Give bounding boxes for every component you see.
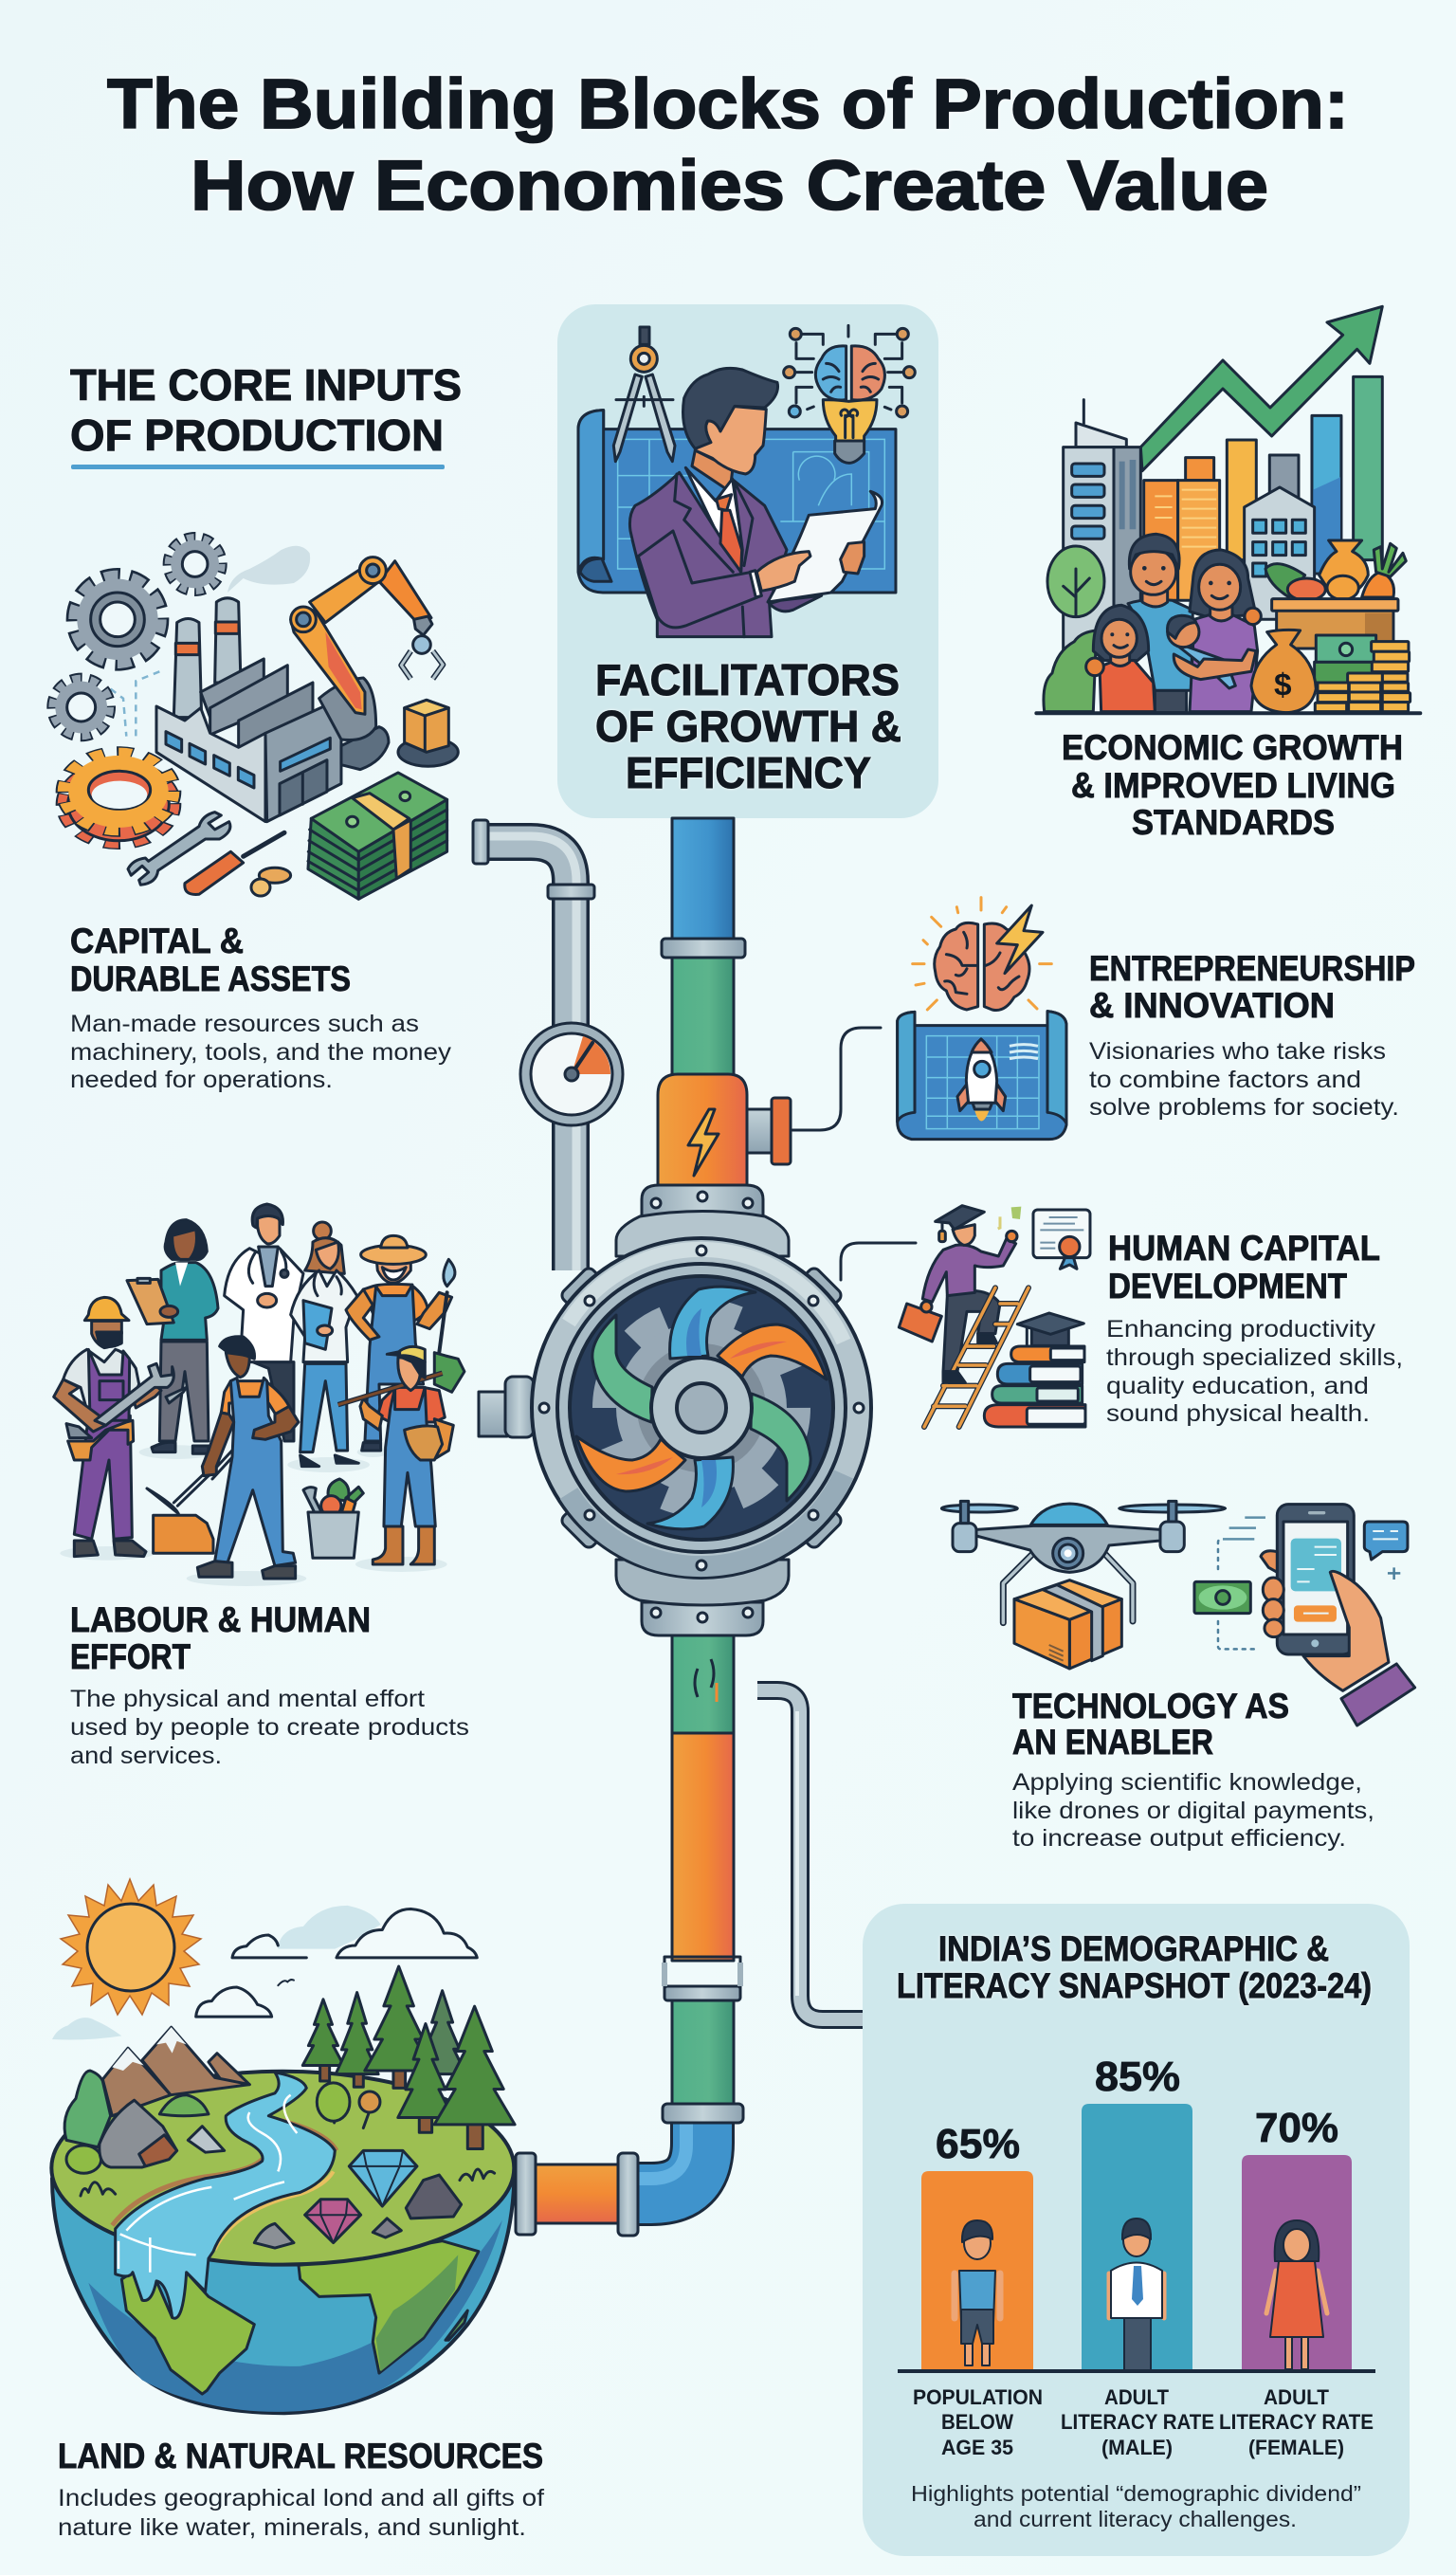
drone [941,1501,1226,1623]
shadows [60,1445,447,1586]
money bag, cash and coins [1251,630,1410,713]
blueprint with rocket [898,1012,1066,1140]
woman with clipboard [127,1220,218,1453]
text: capital and durable assets [70,922,452,1093]
bar labels: BELOW [941,2410,1013,2434]
title [107,64,1349,225]
text: labour and human effort: EFFORT [70,1637,191,1676]
smartphone [1277,1505,1354,1654]
bar labels: POPULATION [913,2385,1043,2409]
banknote and dotted payment path [1194,1518,1265,1649]
harvest crate and produce [1265,540,1406,648]
label: facilitators [595,655,901,797]
bar: 70 percent adult literacy female [1242,2105,1352,2371]
bricks and pick [147,1430,254,1553]
text: entrepreneurship and innovation: & INNOVATION [1089,986,1335,1025]
clouds [52,1906,477,2039]
bar labels: LITERACY RATE [1219,2410,1374,2434]
label: economic growth: ECONOMIC GROWTH [1062,728,1403,767]
text: land and natural resources: LAND & NATURAL RESOURCES [58,2437,543,2475]
lightning bolt [997,905,1043,974]
farmer with straw hat and trowel [346,1235,455,1451]
label: facilitators: OF GROWTH & [595,702,901,751]
text: technology as an enabler: like drones or digital payments, [1012,1798,1374,1824]
text: technology as an enabler [1012,1687,1374,1852]
text: human capital development: sound physical health. [1106,1400,1370,1427]
panel footnote: and current literacy challenges. [974,2507,1297,2531]
text: labour and human effort: The physical and mental effort [70,1686,425,1712]
certificate [998,1207,1090,1269]
text: entrepreneurship and innovation: solve problems for society. [1089,1094,1399,1121]
connector line to human capital [841,1243,916,1280]
text: human capital development: HUMAN CAPITAL [1108,1229,1380,1268]
icon: graduate climbing ladder [899,1206,1090,1427]
text: human capital development: DEVELOPMENT [1108,1267,1347,1306]
label: economic growth: & IMPROVED LIVING [1071,766,1395,805]
panel heading: INDIA’S DEMOGRAPHIC & [938,1929,1329,1968]
robot arm [291,557,443,770]
icon: factory tools and money [52,538,458,899]
text: technology as an enabler: Applying scientific knowledge, [1012,1769,1362,1796]
figure: manager in purple suit [629,368,883,637]
label: economic growth: STANDARDS [1132,803,1335,842]
pipe: thin grey capital pipe [473,820,594,1270]
heading: the core inputs of production: OF PRODUCTION [70,411,444,460]
stack of books and cap [984,1313,1085,1427]
connector line to entrepreneurship [792,1028,881,1130]
label: facilitators: FACILITATORS [595,655,900,704]
factory building [156,598,341,822]
panel: India's demographic and literacy snapshot [863,1904,1410,2556]
text: labour and human effort: LABOUR & HUMAN [70,1600,371,1639]
icon: compass [613,327,675,462]
panel footnote: Highlights potential “demographic dividend” [911,2481,1361,2506]
bar: 65 percent population below age 35 [921,2121,1033,2371]
label: facilitators: EFFICIENCY [626,748,871,797]
heading: the core inputs of production [70,360,462,469]
bar: 65 percent population below age 35: 65% [936,2121,1020,2167]
hand and sleeve [1261,1551,1415,1726]
title: How Economies Create Value [191,146,1268,225]
icon: globe with land and resources [51,1906,515,2413]
icon: economic growth city and family [1036,306,1420,713]
icon: drone, parcel and smartphone [941,1501,1415,1726]
nurse [291,1222,358,1467]
mountains, boulders and bush [64,2027,495,2196]
heading: the core inputs of production: THE CORE INPUTS [70,360,462,410]
text: technology as an enabler: AN ENABLER [1012,1723,1213,1762]
text: human capital development: quality education, and [1106,1373,1369,1399]
text: entrepreneurship and innovation [1089,949,1415,1121]
bar labels: (MALE) [1101,2436,1173,2459]
text: land and natural resources [58,2437,544,2541]
land disc [51,2072,514,2265]
bar: 85 percent adult literacy male: 85% [1095,2054,1180,2100]
text: land and natural resources: Includes geographical lond and all gifts of [58,2485,544,2511]
bar: 85 percent adult literacy male [1082,2054,1192,2371]
doctor [225,1204,303,1441]
text: human capital development: Enhancing productivity [1106,1316,1376,1342]
bars: growth chart [1227,376,1382,574]
text: labour and human effort [70,1600,469,1769]
text: land and natural resources: nature like water, minerals, and sunlight. [58,2514,526,2541]
text: human capital development: through specialized skills, [1106,1344,1403,1371]
icon: workers group [54,1204,464,1586]
bar labels [913,2385,1374,2459]
money bag, cash and coins: $ [1274,667,1292,703]
text: entrepreneurship and innovation: Visionaries who take risks [1089,1038,1386,1065]
small crate on stand [398,700,458,766]
bucket of vegetables [303,1479,363,1558]
text: capital and durable assets: Man-made resources such as [70,1011,419,1037]
text: capital and durable assets: DURABLE ASSETS [70,959,351,998]
icon: brain light bulb [784,325,915,463]
globe body and continents [52,2164,515,2413]
panel: facilitators of growth and efficiency [557,304,938,818]
tree and bush [1044,546,1104,712]
bar chart [898,2054,1375,2459]
bar labels: ADULT [1104,2385,1170,2409]
icon: sun [61,1879,201,2015]
bar labels: ADULT [1264,2385,1330,2409]
valve: orange side valve [747,1098,791,1164]
person legs behind ladder [943,1291,1000,1372]
worker with hard hat and wrench [54,1297,187,1557]
arrow: rising green trend [1140,306,1382,471]
family [1086,534,1261,713]
parcel [1014,1580,1121,1669]
text: entrepreneurship and innovation: ENTREPRENEURSHIP [1089,949,1415,988]
title: The Building Blocks of Production: [107,64,1349,143]
climbing graduate [899,1206,1017,1382]
brain [935,922,1029,1011]
gears and smoke [52,538,310,740]
text: technology as an enabler: to increase output efficiency. [1012,1825,1346,1852]
pipe: lower main with collar and elbow [516,1626,743,2236]
pump gears and blades [576,1287,827,1529]
text: technology as an enabler: TECHNOLOGY AS [1012,1687,1289,1726]
icon: brain and rocket blueprint [898,898,1066,1140]
pump housing [479,1185,871,1635]
text: labour and human effort: used by people to create products [70,1714,469,1741]
front worker in blue overalls [197,1337,299,1579]
panel footnote [911,2481,1361,2531]
pump bolts [651,1192,753,1622]
trees [302,1966,515,2149]
text: entrepreneurship and innovation: to combine factors and [1089,1067,1361,1093]
buildings [1064,400,1315,649]
pipe: main vertical upper [658,818,747,1187]
river and waterfall [112,2073,337,2318]
chat bubble [1364,1522,1408,1580]
ground line [1036,711,1420,715]
pipe: thin grey to India panel [757,1690,864,2019]
spark rays [913,898,1051,1010]
icon: blueprint and manager [578,325,915,637]
hand tools [128,813,291,896]
label: economic growth [1062,728,1403,842]
plant [434,1353,464,1392]
panel heading [897,1929,1372,2005]
bar labels: (FEMALE) [1248,2436,1344,2459]
gems and rocks [254,2150,462,2248]
woman with yellow hat and basket [338,1346,453,1564]
text: labour and human effort: and services. [70,1743,222,1769]
text: capital and durable assets: CAPITAL & [70,922,244,960]
ladder [924,1288,1028,1427]
bar: 70 percent adult literacy female: 70% [1255,2105,1338,2151]
bar labels: AGE 35 [941,2436,1013,2459]
icon: central pump [479,1185,871,1635]
stack of money [308,773,447,899]
text: capital and durable assets: needed for operations. [70,1067,333,1093]
icon: pressure gauge [520,1023,623,1125]
text: human capital development [1106,1229,1403,1427]
bar labels: LITERACY RATE [1061,2410,1214,2434]
axis [898,2369,1375,2373]
panel heading: LITERACY SNAPSHOT (2023-24) [897,1966,1372,2005]
text: capital and durable assets: machinery, tools, and the money [70,1039,452,1066]
orange gear [64,753,173,843]
